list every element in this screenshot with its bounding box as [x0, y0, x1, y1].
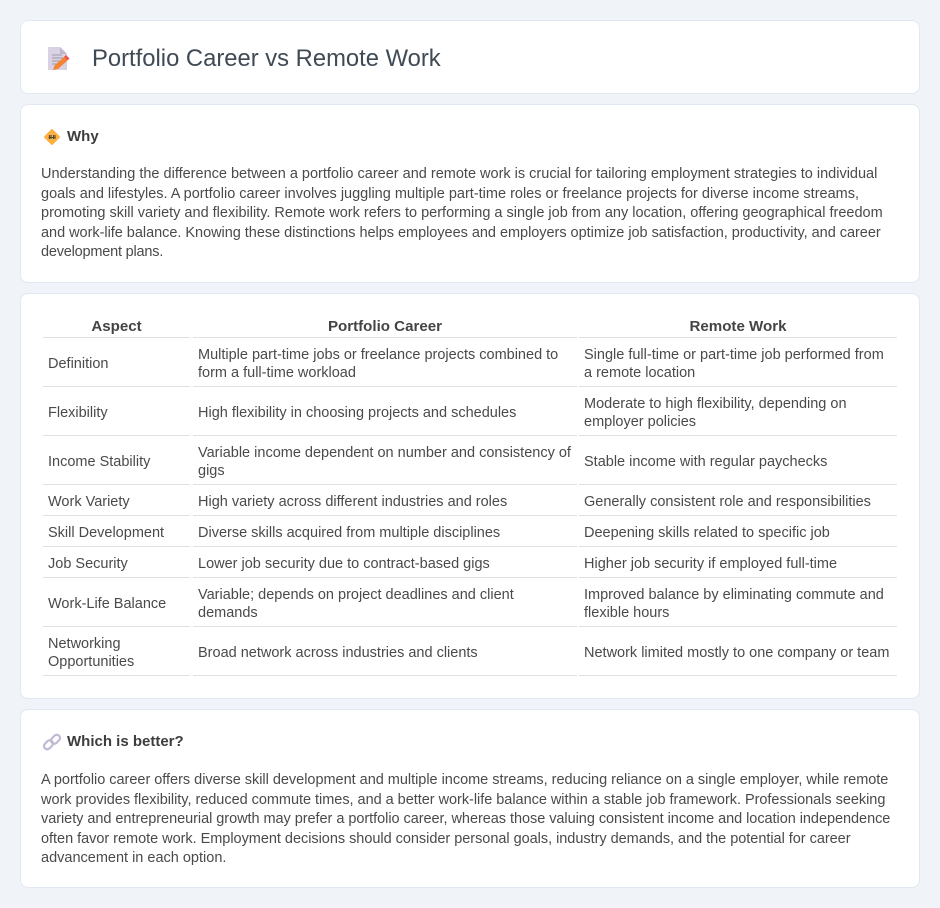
comparison table: Lower job security due to contract-based gigs: [198, 556, 490, 572]
comparison table: High variety across different industries and roles: [198, 494, 507, 510]
text block: why: goals and lifestyles. A portfolio career involves juggling multiple part-time roles or freelance projects for diverse income streams,: [41, 186, 859, 202]
icon: link: [43, 734, 61, 750]
heading: why: Why: [67, 128, 99, 145]
text block: which is better: advancement in each option.: [41, 850, 226, 866]
comparison table: Work-Life Balance: [48, 596, 166, 612]
comparison table: Multiple part-time jobs or freelance projects combined to: [198, 347, 558, 363]
comparison table: Definition: [48, 356, 108, 372]
comparison table: Networking: [48, 636, 121, 652]
comparison table: Income Stability: [48, 454, 150, 470]
comparison table: Stable income with regular paychecks: [584, 454, 827, 470]
heading: which is better: Which is better?: [67, 733, 184, 750]
comparison table: Higher job security if employed full-time: [584, 556, 837, 572]
panel: comparison table: [20, 293, 920, 699]
title: Portfolio Career vs Remote Work: [92, 45, 441, 72]
comparison table: Remote Work: [689, 318, 786, 335]
comparison table: Flexibility: [48, 405, 108, 421]
text block: why: and work-life balance. Knowing these distinctions helps employees and employers optimize job satisfaction, productivity, and career: [41, 224, 881, 240]
comparison table: Opportunities: [48, 654, 134, 670]
panel: which is better: [20, 709, 920, 888]
comparison table: Aspect: [91, 318, 142, 335]
text block: why: promoting skill variety and flexibility. Remote work refers to performing a single job from any location, offering geographical freedom: [41, 205, 883, 221]
comparison table: demands: [198, 605, 258, 621]
text block: which is better: often favor remote work. Employment decisions should consider personal goals, industry demands, and the potential for career: [41, 830, 851, 846]
comparison table: form a full-time workload: [198, 365, 356, 381]
comparison table: Variable; depends on project deadlines and client: [198, 587, 514, 603]
text block: why: [41, 166, 883, 260]
text block: which is better: [41, 772, 890, 866]
icon: diamond sign: [44, 129, 60, 145]
comparison table: Improved balance by eliminating commute and: [584, 587, 884, 603]
comparison table: Job Security: [48, 556, 128, 572]
text block: which is better: variety and entrepreneurial growth may prefer a portfolio career, whereas those valuing consistent income and location independence: [41, 811, 890, 827]
comparison table: High flexibility in choosing projects and schedules: [198, 405, 516, 421]
comparison table: a remote location: [584, 365, 695, 381]
comparison table: Generally consistent role and responsibilities: [584, 494, 871, 510]
panel: why: [20, 104, 920, 283]
comparison table: Variable income dependent on number and consistency of: [198, 445, 571, 461]
icon: document with pencil: [48, 47, 70, 70]
comparison table: Moderate to high flexibility, depending on: [584, 396, 847, 412]
text block: which is better: A portfolio career offers diverse skill development and multiple income streams, reducing reliance on a single employer, while remote: [41, 772, 888, 788]
comparison table: Diverse skills acquired from multiple disciplines: [198, 525, 500, 541]
text block: which is better: work provides flexibility, reduced commute times, and a better work-life balance within a stable job framework. Professionals seeking: [41, 792, 885, 808]
comparison table: Work Variety: [48, 494, 130, 510]
panel: title: [20, 20, 920, 94]
comparison table: Deepening skills related to specific job: [584, 525, 830, 541]
comparison table: Single full-time or part-time job performed from: [584, 347, 884, 363]
comparison table: Portfolio Career: [328, 318, 442, 335]
comparison table: Network limited mostly to one company or team: [584, 645, 889, 661]
comparison table: employer policies: [584, 414, 696, 430]
comparison table: Skill Development: [48, 525, 164, 541]
text block: why: Understanding the difference between a portfolio career and remote work is crucial for tailoring employment strategies to individual: [41, 166, 877, 182]
comparison table: Broad network across industries and clients: [198, 645, 478, 661]
text block: why: development plans.: [41, 244, 163, 260]
comparison table: gigs: [198, 463, 225, 479]
comparison table: flexible hours: [584, 605, 669, 621]
